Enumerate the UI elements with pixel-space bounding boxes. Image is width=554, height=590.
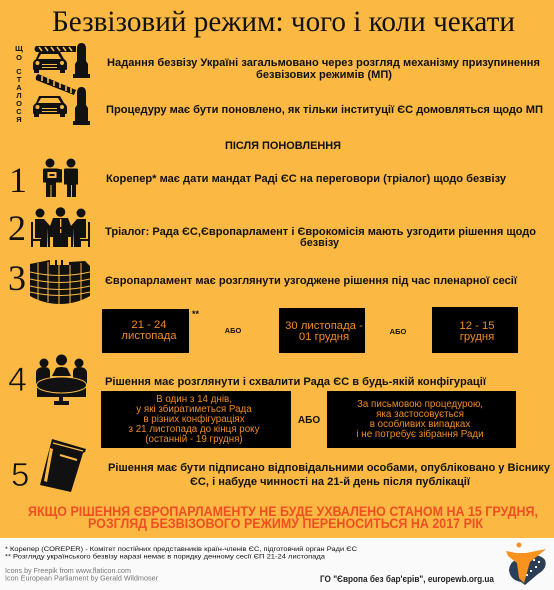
text: status 1	[107, 57, 540, 81]
box: written procedure: яка застосовується	[376, 409, 464, 420]
icon credits	[5, 568, 159, 582]
footnotes	[5, 545, 357, 560]
date box: 30 листопада - 01 грудня	[279, 308, 365, 353]
vertical label: що сталося: Л	[16, 91, 22, 100]
text: status 2: Процедуру має бути поновлено, як тільки інституції ЄС домовляться щодо МП	[106, 104, 543, 116]
icon: open barrier with car	[33, 74, 90, 125]
vertical label: що сталося: О	[16, 99, 22, 108]
icon: meeting of three people	[31, 207, 90, 247]
or label: АБО	[390, 327, 406, 336]
icon: round table meeting	[36, 354, 87, 405]
warning text: РОЗГЛЯД БЕЗВІЗОВОГО РЕЖИМУ ПЕРЕНОСИТЬСЯ НА 2017 РІК	[88, 516, 484, 531]
icon: closed barrier with car	[33, 43, 90, 78]
box: written procedure: і не потребує зібрання Ради	[356, 429, 484, 440]
number 4: 4	[8, 361, 27, 399]
vertical label: що сталося: С	[16, 67, 22, 76]
box: meeting option: В один з 14 днів,	[156, 394, 232, 405]
text: step 1: Корепер* має дати мандат Раді ЄС на переговори (тріалог) щодо безвізу	[106, 173, 507, 185]
date box: 21-24 листопада	[102, 309, 189, 353]
organisation name: ГО "Європа без бар'єрів", europewb.org.ua	[320, 574, 495, 584]
icon: two people	[43, 158, 78, 197]
icon credits: Icon European Parliament by Gerald Wildmoser	[5, 576, 159, 582]
box: written procedure	[327, 391, 516, 448]
or label: АБО	[298, 415, 320, 426]
number 5: 5	[11, 456, 29, 493]
box: meeting option	[101, 391, 291, 448]
number 1: 1	[9, 160, 27, 200]
text: step 4: Рішення має розглянути і схвалити Рада ЄС в будь-якій конфігурації	[105, 376, 487, 388]
heading: після поновлення: ПІСЛЯ ПОНОВЛЕННЯ	[225, 140, 341, 152]
text: status 1: Надання безвізу Україні загальмовано через розгляд механізму призупинення	[107, 57, 540, 69]
text: step 2: Тріалог: Рада ЄС,Європарламент і Єврокомісія мають узгодити рішення щодо	[105, 226, 536, 238]
or label: АБО	[225, 326, 241, 335]
date box: 12-15 грудня	[432, 307, 518, 353]
date box: 12-15 грудня: 12 - 15	[459, 320, 495, 332]
date box: 30 листопада - 01 грудня: 01 грудня	[299, 331, 349, 343]
text: status 1: безвізових режимів (МП)	[256, 69, 392, 81]
icon credits: Icons by Freepik from www.flaticon.com	[5, 568, 131, 575]
text: step 3: Європарламент має розглянути узгоджене рішення під час пленарної сесії	[105, 275, 518, 287]
text: step 5: ЄС, і набуде чинності на 21-й день після публікації	[190, 476, 471, 488]
title: Безвізовий режим: чого і коли чекати	[52, 5, 515, 38]
vertical label: що сталося: О	[16, 53, 22, 62]
footer panel	[0, 538, 554, 590]
date box: 21-24 листопада: 21 - 24	[131, 319, 167, 331]
date box: 21-24 листопада: листопада	[121, 330, 177, 342]
text: step 2	[105, 226, 536, 249]
vertical label: що сталося: Щ	[15, 44, 23, 53]
box: meeting option: в різних конфігураціях	[143, 414, 245, 425]
box: meeting option: (останній - 19 грудня)	[145, 434, 243, 445]
icon: european parliament	[30, 260, 90, 304]
date box: 12-15 грудня: грудня	[460, 331, 494, 343]
vertical label: що сталося: С	[16, 107, 22, 116]
box: meeting option: у які збиратиметься Рада	[136, 404, 252, 415]
text: step 2: безвізу	[300, 237, 340, 249]
text: step 5: Рішення має бути підписано відповідальними особами, опубліковано у Віснику	[108, 462, 551, 474]
text: step 5	[108, 462, 551, 488]
warning text	[28, 504, 538, 531]
vertical label: що сталося: Я	[16, 115, 22, 124]
vertical label: що сталося: Т	[17, 75, 22, 84]
vertical label: що сталося: А	[16, 83, 22, 92]
vertical label: що сталося	[15, 44, 23, 124]
number 2: 2	[8, 208, 26, 248]
box: written procedure: За письмовою процедурою,	[357, 399, 483, 410]
date box: 30 листопада - 01 грудня: 30 листопада -	[285, 320, 363, 332]
footnote mark: **	[192, 309, 200, 319]
footnotes: ** Розгляду українського безвізу наразі немає в порядку денному сесії ЄП 21-24 листопада	[5, 552, 325, 560]
number 3: 3	[8, 258, 26, 298]
icon: book	[40, 439, 86, 492]
footnotes: * Корепер (COREPER) - Комітет постійних представників країн-членів ЄС, підготовчий орган Ради ЄС	[5, 545, 357, 553]
logo	[506, 542, 546, 585]
box: written procedure: в особливих випадках	[370, 419, 470, 430]
box: meeting option: з 21 листопада до кінця року	[129, 424, 260, 435]
